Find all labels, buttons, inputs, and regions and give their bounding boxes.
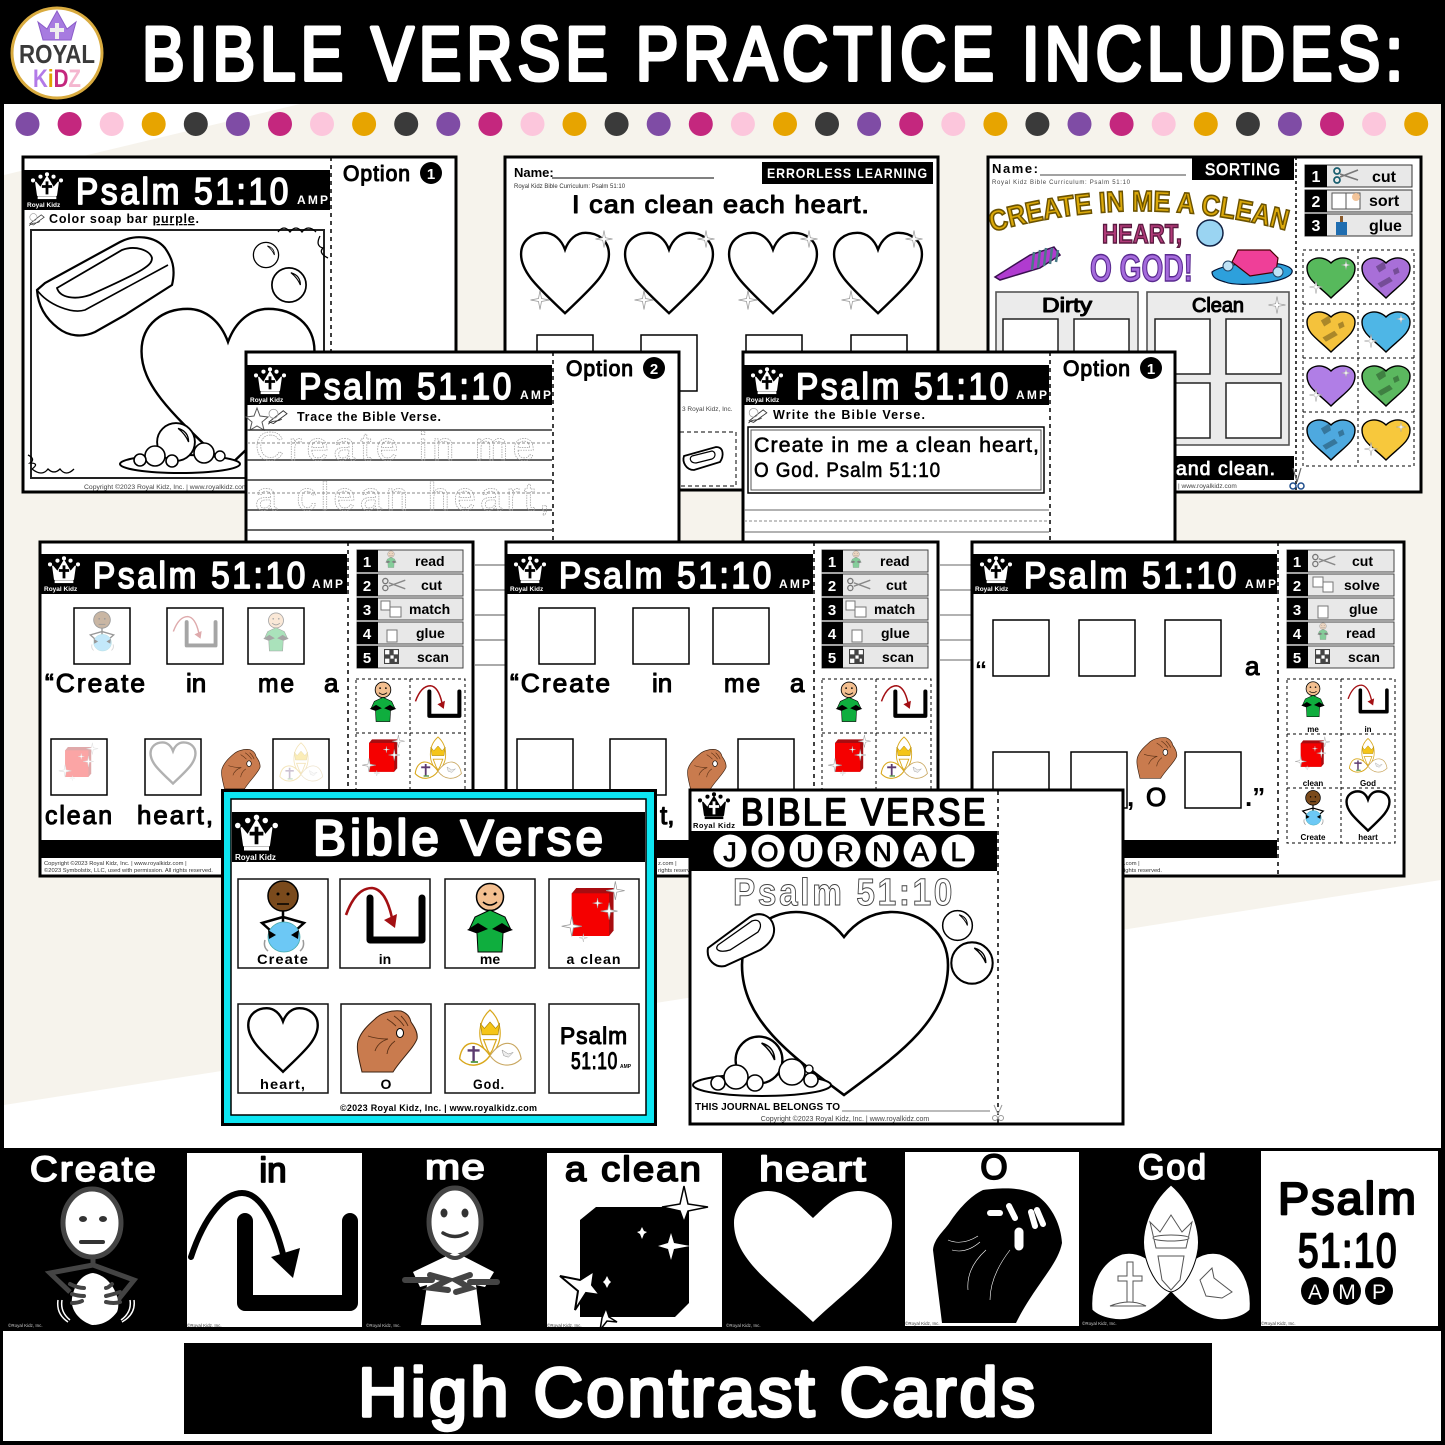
panel: match worksheet with picture hints: in: [186, 668, 206, 698]
panel: Bible Verse Journal: [690, 790, 1123, 1124]
panel: errorless learning worksheet: 3 Royal Kidz, Inc.: [682, 406, 733, 413]
panel: match worksheet with empty boxes: rights reserved.: [658, 868, 698, 874]
panel: sorting worksheet: Dirty: [1042, 295, 1092, 317]
panel: solve worksheet: heart: [1358, 833, 1378, 842]
panel: sorting worksheet: 3: [1312, 218, 1321, 235]
panel: write the Bible verse worksheet: Psalm 51:10: [796, 366, 1011, 407]
high contrast card: a clean: [547, 1150, 722, 1330]
panel: match worksheet with empty boxes: scan: [882, 649, 914, 665]
journal letters: [714, 834, 974, 868]
panel: solve worksheet: 1: [1293, 554, 1301, 571]
panel: Bible Verse picture cards (cyan border): Royal Kidz: [235, 853, 276, 862]
panel: match worksheet with picture hints: 3: [363, 602, 371, 619]
card: Psalm reference: Psalm: [560, 1023, 628, 1050]
panel: trace the Bible verse worksheet: Trace the Bible Verse.: [297, 410, 441, 424]
panel: match worksheet with picture hints: read: [415, 553, 445, 569]
journal letters: L: [950, 837, 966, 867]
panel: solve worksheet: ights reserved.: [1124, 868, 1162, 874]
panel: solve worksheet: 2: [1293, 578, 1301, 595]
panel: trace the Bible verse worksheet: Option: [566, 356, 634, 381]
panel: write the Bible verse worksheet: [743, 352, 1175, 797]
panel: trace the Bible verse worksheet: Psalm 51:10: [299, 366, 514, 407]
panel: Bible Verse Journal: BIBLE VERSE: [741, 792, 988, 834]
panel: errorless learning worksheet: Royal Kidz Bible Curriculum: Psalm 51:10: [514, 184, 626, 190]
panel: soap bar coloring worksheet: 1: [427, 166, 435, 183]
logo: Royal Kidz: KiDZ: [33, 65, 81, 93]
panel: errorless learning worksheet: Name:: [514, 165, 554, 180]
panel: write the Bible verse worksheet: Option: [1063, 356, 1131, 381]
card: O: [341, 1004, 431, 1093]
panel: errorless learning worksheet: I can clean each heart.: [572, 191, 870, 219]
panel: match worksheet with picture hints: heart,: [137, 800, 215, 830]
panel: solve worksheet: solve: [1344, 577, 1380, 593]
panel: match worksheet with picture hints: me: [258, 668, 296, 698]
high contrast card: Create: [8, 1150, 158, 1328]
panel: match worksheet with picture hints: match: [409, 601, 450, 617]
panel: match worksheet with picture hints: “Create: [45, 668, 147, 698]
panel: sorting worksheet: 2: [1312, 194, 1321, 211]
high contrast card: Psalm 51:10 AMP: ©Royal Kidz, Inc.: [1261, 1320, 1296, 1326]
panel: match worksheet with empty boxes: match: [874, 601, 915, 617]
panel: Bible Verse picture cards (cyan border): ©2023 Royal Kidz, Inc. | www.royalkidz.com: [340, 1103, 537, 1113]
panel: sorting worksheet: and clean.: [1176, 459, 1276, 480]
panel: solve worksheet: O: [1146, 782, 1166, 812]
panel: match worksheet with empty boxes: 4: [828, 626, 837, 643]
panel: soap bar coloring worksheet: Copyright ©2023 Royal Kidz, Inc. | www.royalkidz.com: [84, 483, 248, 491]
panel: solve worksheet: 5: [1293, 650, 1301, 667]
panel: match worksheet with picture hints: cut: [421, 577, 442, 593]
panel: match worksheet with picture hints: ©2023 Symbolstix, LLC, used with permission. All rights reserved.: [44, 867, 213, 874]
card: Psalm reference: AMP: [620, 1064, 632, 1070]
panel: match worksheet with empty boxes: [506, 542, 938, 876]
panel: match worksheet with empty boxes: 2: [828, 578, 836, 595]
panel: solve worksheet: ,: [1127, 782, 1134, 812]
panel: solve worksheet: “: [975, 657, 987, 684]
logo: Royal Kidz: [12, 8, 102, 98]
high contrast card: O: ©Royal Kidz, Inc.: [905, 1320, 940, 1326]
card: O: O: [381, 1076, 392, 1092]
panel: solve worksheet: 4: [1293, 626, 1302, 643]
banner: High Contrast Cards: [184, 1343, 1212, 1434]
panel: match worksheet with empty boxes: 3: [828, 602, 836, 619]
card: a clean: a clean: [566, 951, 622, 967]
panel: sorting worksheet: | www.royalkidz.com: [1178, 483, 1237, 490]
panel: match worksheet with picture hints: 1: [363, 554, 371, 571]
panel: Bible Verse picture cards (cyan border): Bible Verse: [313, 810, 607, 866]
panel: soap bar coloring worksheet: AMP: [297, 193, 328, 207]
curved heading: O GOD!: [1090, 248, 1193, 290]
panel: match worksheet with picture hints: glue: [416, 625, 445, 641]
panel: Bible Verse picture cards (cyan border): [221, 789, 657, 1126]
panel: Bible Verse Journal: Psalm 51:10: [733, 872, 955, 914]
panel: solve worksheet: me: [1307, 725, 1319, 734]
panel: trace the Bible verse worksheet: AMP: [520, 388, 551, 402]
panel: solve worksheet: Create: [1301, 833, 1326, 842]
logo: Royal Kidz: ROYAL: [19, 39, 95, 69]
panel: match worksheet with empty boxes: 1: [828, 554, 836, 571]
journal letters: N: [872, 837, 892, 867]
card: heart: [238, 1004, 328, 1093]
panel: write the Bible verse worksheet: Royal Kidz: [746, 397, 780, 404]
panel: soap bar coloring worksheet: Psalm 51:10: [76, 171, 291, 212]
panel: soap bar coloring worksheet: Royal Kidz: [27, 202, 61, 209]
high contrast card: a clean: a clean: [565, 1150, 703, 1189]
card: Create: [238, 879, 328, 968]
panel: write the Bible verse worksheet: Create in me a clean heart,: [754, 434, 1040, 457]
panel: match worksheet with empty boxes: Psalm 51:10: [559, 555, 774, 596]
panel: solve worksheet: scan: [1348, 649, 1380, 665]
panel: solve worksheet: 3: [1293, 602, 1301, 619]
panel: solve worksheet: Royal Kidz: [975, 586, 1009, 593]
panel: solve worksheet: a: [1245, 651, 1260, 681]
panel: match worksheet with empty boxes: Royal Kidz: [510, 586, 544, 593]
panel: soap bar coloring worksheet: Option: [343, 161, 411, 186]
high contrast card: Create: ©Royal Kidz, Inc.: [8, 1322, 43, 1328]
high contrast card: Psalm 51:10 AMP: P: [1372, 1281, 1386, 1304]
card: me: me: [480, 951, 500, 967]
panel: match worksheet with empty boxes: t,: [660, 800, 674, 830]
panel: match worksheet with empty boxes: read: [880, 553, 910, 569]
panel: sorting worksheet: SORTING: [1205, 160, 1281, 179]
journal letters: J: [723, 837, 737, 867]
card: heart: heart,: [260, 1076, 306, 1092]
panel: sorting worksheet: Name:: [992, 161, 1038, 176]
high contrast card: Psalm 51:10 AMP: A: [1308, 1281, 1322, 1304]
panel: write the Bible verse worksheet: O God. Psalm 51:10: [754, 459, 941, 482]
high contrast card: Psalm 51:10 AMP: M: [1338, 1281, 1356, 1304]
panel: solve worksheet: cut: [1352, 553, 1373, 569]
card: God: [445, 1004, 535, 1093]
panel: match worksheet with picture hints: Royal Kidz: [44, 586, 78, 593]
panel: match worksheet with empty boxes: in: [652, 668, 672, 698]
high contrast card: in: ©Royal Kidz, Inc.: [187, 1322, 222, 1328]
high contrast card: Psalm 51:10 AMP: [1261, 1151, 1438, 1326]
panel: errorless learning worksheet: ERRORLESS LEARNING: [767, 165, 928, 181]
panel: solve worksheet: glue: [1349, 601, 1378, 617]
high contrast card: Psalm 51:10 AMP: 51:10: [1298, 1225, 1398, 1278]
panel: errorless learning worksheet: [505, 157, 938, 490]
high contrast card: Psalm 51:10 AMP: Psalm: [1278, 1173, 1418, 1224]
panel: sorting worksheet: 1: [1312, 169, 1321, 186]
panel: match worksheet with empty boxes: “Create: [510, 668, 612, 698]
journal letters: O: [757, 837, 779, 867]
panel: Bible Verse Journal: THIS JOURNAL BELONGS TO: [695, 1102, 840, 1113]
card: Create: Create: [257, 951, 309, 967]
high contrast card: heart: ©Royal Kidz, Inc.: [726, 1322, 761, 1328]
curved heading: [989, 190, 1290, 290]
high contrast card: heart: [726, 1150, 892, 1328]
panel: solve worksheet: .”: [1245, 782, 1265, 812]
panel: match worksheet with picture hints: 2: [363, 578, 371, 595]
high contrast card: God: [1082, 1148, 1250, 1326]
card: me: [445, 879, 535, 968]
panel: match worksheet with picture hints: 5: [363, 650, 371, 667]
card: Psalm reference: 51:10: [571, 1048, 618, 1075]
high contrast card: God: ©Royal Kidz, Inc.: [1082, 1320, 1117, 1326]
card: Psalm reference: [549, 1004, 639, 1093]
panel: trace the Bible verse worksheet: 2: [650, 361, 658, 378]
panel: soap bar coloring worksheet: [23, 157, 456, 492]
panel: Bible Verse Journal: Copyright ©2023 Royal Kidz, Inc. | www.royalkidz.com: [761, 1115, 929, 1123]
panel: solve worksheet: read: [1346, 625, 1376, 641]
high contrast card: me: [366, 1148, 497, 1328]
panel: solve worksheet: .com |: [1124, 861, 1140, 867]
high contrast card: in: [187, 1151, 362, 1328]
panel: match worksheet with picture hints: 4: [363, 626, 372, 643]
panel: match worksheet with empty boxes: cut: [886, 577, 907, 593]
journal letters: U: [796, 837, 816, 867]
panel: sorting worksheet: glue: [1369, 218, 1402, 235]
panel: Bible Verse Journal: Royal Kidz: [693, 821, 735, 830]
panel: trace the Bible verse worksheet: a clean heart,: [255, 475, 550, 519]
panel: solve worksheet: God: [1360, 779, 1376, 788]
high contrast card: in: in: [259, 1151, 287, 1190]
panel: match worksheet with picture hints: Psalm 51:10: [93, 555, 308, 596]
panel: trace the Bible verse worksheet: Create in me: [255, 425, 535, 469]
journal letters: A: [911, 837, 929, 867]
panel: match worksheet with picture hints: [40, 542, 473, 876]
panel: trace the Bible verse worksheet: [246, 352, 679, 797]
panel: solve worksheet: Psalm 51:10: [1024, 555, 1239, 596]
panel: solve worksheet: in: [1364, 725, 1372, 734]
journal letters: R: [834, 837, 854, 867]
curved heading: CREATE IN ME A CLEAN: [989, 190, 1290, 231]
panel: match worksheet with picture hints: clean: [45, 800, 114, 830]
high contrast card strip: [0, 1148, 1445, 1331]
high contrast card: O: O: [980, 1148, 1008, 1187]
high contrast card: God: God: [1138, 1148, 1208, 1187]
panel: solve worksheet: AMP: [1245, 577, 1276, 591]
panel: match worksheet with picture hints: a: [324, 668, 339, 698]
panel: match worksheet with picture hints: scan: [417, 649, 449, 665]
panel: trace the Bible verse worksheet: Royal Kidz: [250, 397, 284, 404]
banner: High Contrast Cards: High Contrast Cards: [358, 1354, 1038, 1431]
panel: sorting worksheet: sort: [1369, 193, 1400, 210]
panel: sorting worksheet: [986, 156, 1422, 494]
panel: solve worksheet: clean: [1303, 779, 1323, 788]
high contrast card: heart: heart: [759, 1150, 867, 1189]
panel: sorting worksheet: Royal Kidz Bible Curriculum: Psalm 51:10: [992, 180, 1131, 186]
curved heading: HEART,: [1102, 219, 1182, 249]
panel: match worksheet with empty boxes: 5: [828, 650, 836, 667]
panel: solve worksheet: [972, 542, 1404, 876]
panel: match worksheet with empty boxes: AMP: [779, 577, 810, 591]
panel: write the Bible verse worksheet: Write the Bible Verse.: [773, 408, 925, 422]
panel: soap bar coloring worksheet: Color soap bar purple.: [49, 212, 199, 226]
card: in: [340, 879, 430, 968]
panel: match worksheet with picture hints: AMP: [312, 577, 343, 591]
panel: match worksheet with empty boxes: glue: [881, 625, 910, 641]
panel: sorting worksheet: cut: [1372, 169, 1397, 186]
high contrast card: me: ©Royal Kidz, Inc.: [366, 1322, 401, 1328]
panel: match worksheet with empty boxes: a: [790, 668, 805, 698]
high contrast card: Create: Create: [30, 1150, 158, 1189]
panel: match worksheet with empty boxes: me: [724, 668, 762, 698]
panel: write the Bible verse worksheet: AMP: [1016, 388, 1047, 402]
high contrast card: a clean: ©Royal Kidz, Inc.: [547, 1322, 582, 1328]
high contrast card: me: me: [425, 1148, 486, 1187]
card: God: God.: [473, 1076, 505, 1092]
dot row: [16, 112, 1428, 136]
panel: write the Bible verse worksheet: 1: [1147, 361, 1155, 378]
panel: match worksheet with empty boxes: z.com |: [658, 861, 677, 867]
card: a clean: [549, 879, 639, 968]
panel: sorting worksheet: Clean: [1192, 295, 1244, 317]
panel: match worksheet with picture hints: Copyright ©2023 Royal Kidz, Inc. | www.royalkidz.com |: [44, 860, 187, 867]
card: in: in: [379, 951, 391, 967]
high contrast card: O: [905, 1148, 1079, 1326]
